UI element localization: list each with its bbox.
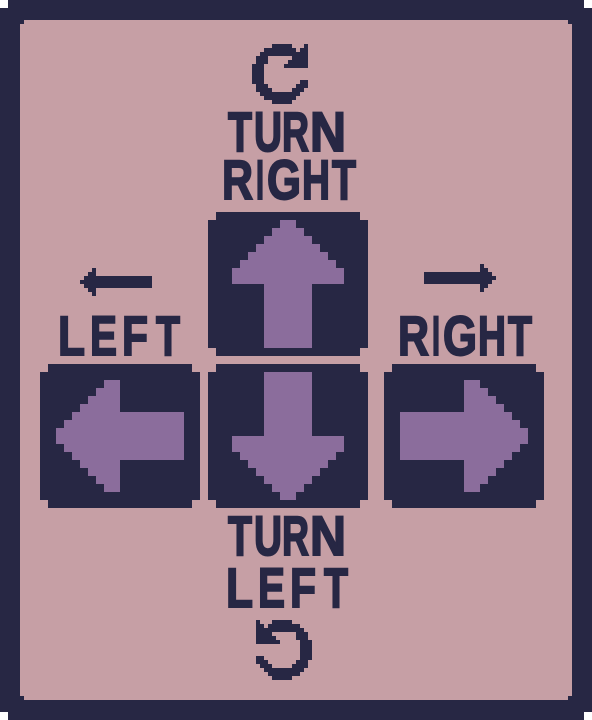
- heading: turn right: U: [254, 100, 282, 163]
- heading: turn left: [226, 504, 348, 619]
- heading: turn left: L: [226, 556, 253, 619]
- heading: turn right: R: [222, 148, 253, 211]
- heading: turn left: T: [228, 504, 252, 567]
- heading: turn right: G: [267, 148, 301, 211]
- heading: turn left: F: [290, 556, 316, 619]
- arrow: right: [400, 380, 528, 492]
- heading: turn right: N: [310, 100, 346, 163]
- arrow: up: [232, 220, 344, 348]
- icon: rotate clockwise: [252, 44, 308, 104]
- label: right: I: [432, 304, 440, 367]
- arrow: left: [56, 380, 184, 492]
- heading: turn right: T: [332, 148, 356, 211]
- icon: small right arrow: [424, 264, 496, 292]
- label: right: G: [443, 304, 477, 367]
- label: left: T: [156, 304, 180, 367]
- label: right: R: [398, 304, 429, 367]
- key: right: [384, 364, 544, 508]
- label: right: H: [478, 304, 506, 367]
- heading: turn right: R: [282, 100, 309, 163]
- label: left: E: [90, 304, 117, 367]
- key: up: [208, 212, 368, 356]
- heading: turn left: T: [324, 556, 348, 619]
- icon: rotate counterclockwise: [256, 620, 312, 680]
- heading: turn left: E: [258, 556, 285, 619]
- label: right: T: [508, 304, 532, 367]
- label: left: L: [58, 304, 85, 367]
- icon: small left arrow: [80, 268, 152, 296]
- heading: turn left: N: [310, 504, 346, 567]
- heading: turn right: T: [228, 100, 252, 163]
- heading: turn right: H: [302, 148, 330, 211]
- heading: turn left: U: [254, 504, 282, 567]
- label: left: F: [122, 304, 148, 367]
- key: down: [208, 364, 368, 508]
- arrow: down: [232, 372, 344, 500]
- heading: turn left: R: [282, 504, 309, 567]
- key: left: [40, 364, 200, 508]
- heading: turn right: I: [256, 148, 264, 211]
- heading: turn right: [222, 100, 356, 211]
